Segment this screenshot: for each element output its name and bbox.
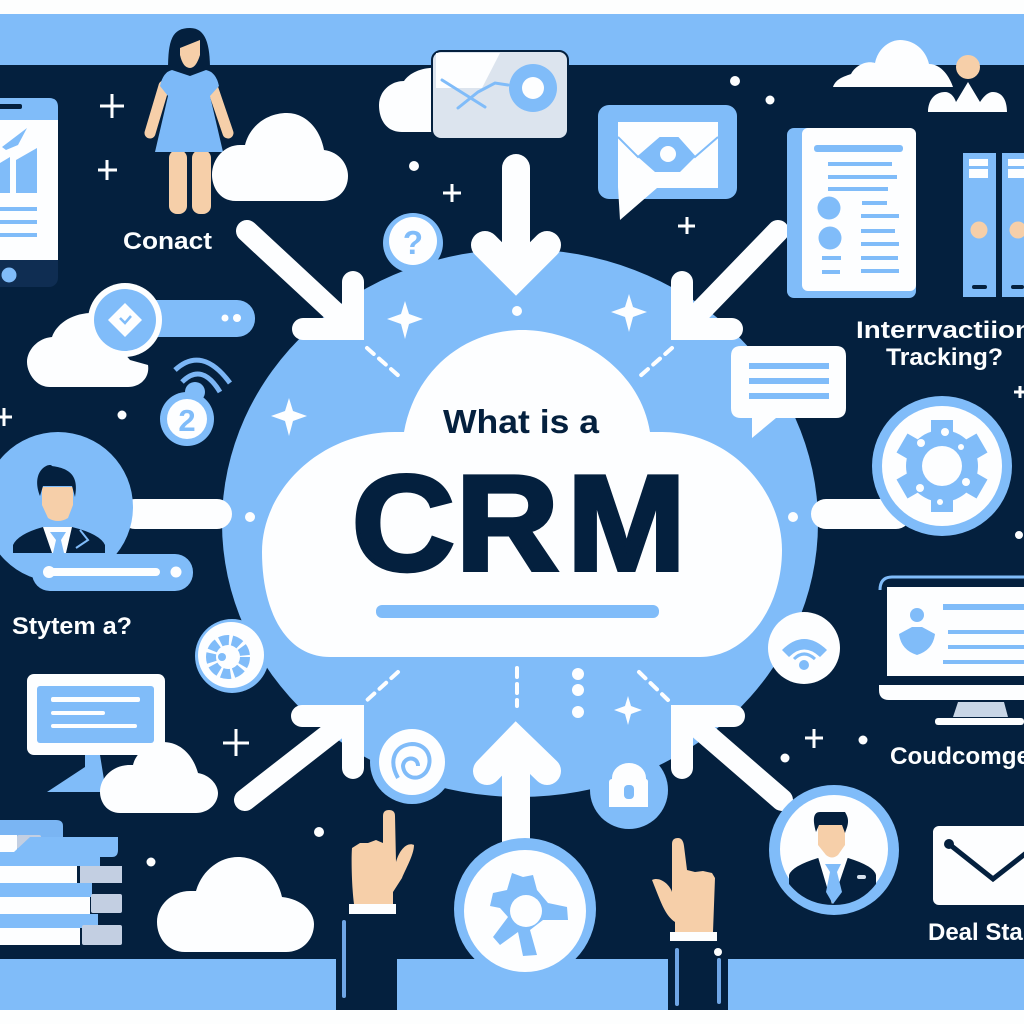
bottom band	[0, 959, 1024, 1010]
label: Deal Stage: Deal Sta	[928, 919, 1023, 946]
label: Conact: Conact	[123, 228, 212, 255]
icon: pointing hand left	[336, 810, 414, 1010]
icon: gear circle	[872, 396, 1012, 536]
icon: cloud with diamond badge	[27, 283, 255, 387]
label: System: Stytem a?	[12, 613, 132, 640]
icon: pointing hand right	[652, 838, 728, 1010]
label: Interaction Tracking: Interrvactiion	[856, 317, 1024, 344]
icon: businessman left	[0, 432, 133, 582]
system input pill	[32, 554, 193, 591]
label: Interaction Tracking	[856, 317, 1024, 371]
connector: left	[120, 499, 232, 529]
heading: CRM: CRM	[352, 447, 686, 599]
icon: businessman right	[769, 785, 899, 915]
arrow: top left	[247, 231, 353, 329]
icon: question badge: ?	[403, 224, 423, 261]
icon: envelope	[933, 826, 1024, 905]
label: Interaction Tracking: Tracking?	[886, 344, 1003, 371]
icon: photo card with cloud	[379, 51, 568, 139]
icon: gear badge left	[195, 619, 269, 693]
arrow: bottom centre	[487, 741, 547, 860]
icon: email eye	[598, 105, 737, 220]
icon: tablet chart	[0, 98, 58, 287]
icon: woman	[150, 28, 228, 214]
icon: user and cloud top right	[833, 40, 1007, 112]
icon: swirl badge	[370, 720, 454, 804]
icon: gear circle bottom	[454, 838, 596, 980]
icon: cloud bottom left 1	[100, 742, 218, 813]
connector: right	[811, 499, 911, 529]
icon: question badge	[383, 213, 443, 273]
underline bar	[376, 605, 659, 618]
icon: document	[787, 128, 916, 298]
icon: chat monitor left	[27, 674, 165, 792]
icon: cloud beside woman	[212, 113, 348, 201]
icon: wifi number badge: 2	[178, 403, 196, 438]
icon: wifi badge right	[768, 612, 840, 684]
heading: What is a: What is a	[443, 403, 600, 440]
icon: monitor right	[879, 577, 1024, 725]
icon: wifi number badge	[160, 360, 230, 446]
icon: binders	[963, 153, 1024, 297]
icon: cloud bottom left 2	[157, 857, 314, 952]
arrow: bottom right	[682, 716, 782, 800]
decorative plus marks	[0, 94, 1024, 756]
top band	[0, 14, 1024, 65]
central cloud hub	[222, 249, 818, 797]
icon: chat bubble	[731, 346, 846, 438]
arrow: top centre	[485, 168, 547, 276]
hub sparkles	[245, 294, 798, 725]
icon: book stack	[0, 820, 122, 945]
icon: lock badge	[590, 751, 668, 829]
arrow: bottom left	[245, 716, 353, 800]
arrow: top right	[682, 231, 778, 329]
decorative dots	[118, 76, 1023, 866]
